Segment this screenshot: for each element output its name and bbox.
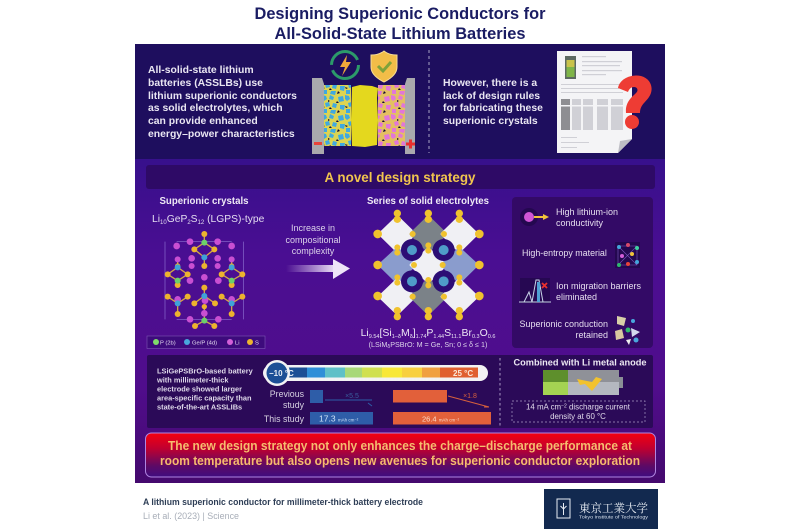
- axis labels: This study: [264, 414, 305, 424]
- panel: introduction: [135, 44, 665, 159]
- heading bar: A novel design strategy: [324, 169, 476, 185]
- legend: crystal atoms: [147, 336, 265, 348]
- intro text: ASSLBs: lithium superionic conductors: [148, 91, 297, 102]
- text: battery summary: [156, 366, 254, 412]
- icon: high-entropy cube: [615, 242, 640, 268]
- footer: citation source: Li et al. (2023) | Science: [143, 511, 239, 521]
- intro text: lack of design rules: [443, 78, 543, 127]
- intro text: ASSLBs: batteries (ASSLBs) use: [148, 78, 263, 89]
- orange bars at 25 degrees: [393, 390, 491, 424]
- blue bars at minus 10 degrees: 17.3 mAh cm⁻²: [319, 414, 359, 424]
- icon: conduction retained: [615, 316, 640, 345]
- heading: series of solid electrolytes: Series of solid electrolytes: [367, 196, 489, 207]
- footer: citation title: A lithium superionic conductor for millimeter-thick battery electrode: [143, 497, 423, 507]
- text: high conductivity: conductivity: [556, 218, 604, 228]
- intro text: ASSLBs: [148, 65, 297, 140]
- caption: increase in compositional complexity: complexity: [292, 246, 335, 256]
- formula: LSiMPSBrO: ]: [413, 327, 416, 339]
- axis labels: Previous: [270, 389, 305, 399]
- caption: increase in compositional complexity: compositional: [285, 235, 341, 245]
- title: [254, 4, 546, 43]
- title: All-Solid-State Lithium Batteries: [274, 24, 526, 43]
- callout: conclusion: [146, 433, 656, 477]
- text: superionic conduction retained: retained: [575, 330, 608, 340]
- callout: conclusion: room temperature but also opens new avenues for superionic conductor exploration: [160, 454, 640, 468]
- icon: lithium ion: [520, 208, 549, 226]
- lattice diagram: [373, 210, 484, 320]
- callout: discharge current: 14 mA cm: [526, 402, 561, 412]
- text: high-entropy: High-entropy material: [522, 248, 607, 258]
- formula: LSiMPSBrO: 1–δ: [392, 334, 401, 340]
- callout: discharge current: [512, 401, 645, 422]
- formula: LSiMPSBrO: 0.3: [472, 334, 480, 340]
- panel: battery performance: [147, 355, 653, 428]
- logo: Tokyo Institute of Technology: Tokyo Institute of Technology: [579, 514, 649, 520]
- intro text: lack of design rules: lack of design rules: [443, 91, 540, 102]
- illustration: solid-state battery: [312, 78, 415, 154]
- formula: LSiMPSBrO: 1.44: [433, 334, 444, 340]
- intro text: lack of design rules: However, there is a: [443, 78, 537, 89]
- panel: novel design strategy: [135, 159, 665, 483]
- icon: minus terminal: [314, 142, 322, 145]
- text: ion migration barriers: Ion migration barriers: [556, 281, 642, 291]
- intro text: ASSLBs: All-solid-state lithium: [148, 65, 254, 76]
- legend: crystal atoms: S: [255, 340, 259, 346]
- text: superionic conduction retained: Superionic conduction: [519, 319, 608, 329]
- axis labels: study: [283, 400, 305, 410]
- formula: LSiMPSBrO: S: [444, 327, 451, 339]
- heading bar: [146, 165, 655, 189]
- formula note: (LSiM: [369, 340, 387, 349]
- text: ion migration barriers: eliminated: [556, 292, 597, 302]
- blue bars at minus 10 degrees: [310, 390, 373, 424]
- heading: superionic crystals: Superionic crystals: [160, 196, 249, 207]
- text: high conductivity: [556, 207, 618, 228]
- orange bars at 25 degrees: ×1.8: [463, 393, 477, 400]
- bar chart: capacity comparison: [264, 389, 491, 424]
- formula: LGPS: GeP: [167, 214, 187, 225]
- legend: crystal atoms: Ge/P (4d): [192, 340, 217, 346]
- formula: LSiMPSBrO: 0.6: [488, 334, 495, 340]
- intro text: ASSLBs: can provide enhanced: [148, 116, 258, 127]
- text: superionic conduction retained: [519, 319, 608, 340]
- icon: question mark: [618, 76, 652, 129]
- icon: charging cycle: [332, 52, 358, 78]
- formula: LSiMPSBrO: Li: [361, 327, 369, 339]
- formula note: δ: [387, 344, 390, 350]
- caption: increase in compositional complexity: Increase in: [291, 223, 335, 233]
- legend: crystal atoms: P (2b): [160, 340, 176, 346]
- callout: discharge current: −2: [561, 404, 567, 410]
- illustration: research paper: [557, 51, 632, 153]
- text: battery summary: state-of-the-art ASSLIBs: [157, 402, 242, 412]
- intro text: ASSLBs: energy–power characteristics: [148, 129, 295, 140]
- formula: LSiMPSBrO: Br: [461, 327, 472, 339]
- icon: plus terminal: [406, 140, 415, 148]
- icon: battery: [543, 370, 623, 395]
- formula: LSiMPSBrO: O: [480, 327, 488, 339]
- formula: LGPS: Li: [152, 214, 160, 225]
- heading: Li metal anode: Combined with Li metal anode: [514, 358, 646, 368]
- formula: LSiMPSBrO: 9.54: [369, 334, 379, 340]
- text: battery summary: area-specific capacity than: [157, 394, 252, 402]
- label: 25 degrees: 25 °C: [453, 369, 473, 378]
- text: battery summary: with millimeter-thick: [156, 376, 229, 384]
- blue bars at minus 10 degrees: ×5.5: [345, 393, 359, 400]
- text: ion migration barriers: [556, 281, 642, 302]
- formula: LSiMPSBrO: [Si: [379, 327, 392, 339]
- legend: crystal atoms: Li: [235, 340, 240, 346]
- text: battery summary: LSiGePSBrO-based battery: [157, 366, 254, 376]
- callout: discharge current: discharge current: [567, 402, 631, 412]
- callout: conclusion: The new design strategy not only enhances the charge–discharge performance at: [168, 439, 633, 453]
- arrow: increasing complexity: [286, 259, 350, 279]
- formula: LSiMPSBrO: P: [426, 327, 433, 339]
- logo: Tokyo Institute of Technology: [544, 489, 658, 529]
- title: Designing Superionic Conductors for: [254, 4, 546, 23]
- formula: LGPS: 12: [198, 220, 205, 226]
- caption: increase in compositional complexity: [285, 223, 341, 256]
- formula: LGPS: 10: [160, 220, 167, 226]
- crystal structure diagram: [165, 231, 245, 329]
- logo: Tokyo Institute of Technology: 東京工業大学: [579, 500, 648, 516]
- icon: safety shield: [371, 51, 397, 82]
- formula: LGPS: 2: [187, 220, 191, 226]
- callout: discharge current: density at 60 °C: [550, 412, 606, 421]
- intro text: lack of design rules: for fabricating these: [443, 103, 543, 114]
- label: minus 10 degrees: −10 °C: [269, 369, 294, 378]
- thermometer: [263, 360, 488, 386]
- formula: LSiMPSBrO: M: [401, 327, 410, 339]
- formula: LSiMPSBrO: 1.74: [416, 334, 426, 340]
- text: high conductivity: High lithium-ion: [556, 207, 618, 217]
- formula: LGPS: S: [191, 214, 198, 225]
- formula: LGPS: (LGPS)-type: [204, 214, 265, 225]
- text: battery summary: electrode showed larger: [157, 384, 242, 394]
- panel: properties: [512, 197, 653, 348]
- intro text: ASSLBs: as solid electrolytes, which: [148, 103, 283, 114]
- formula: LSiMPSBrO: 11.1: [451, 334, 461, 340]
- orange bars at 25 degrees: 26.4 mAh cm⁻²: [422, 414, 460, 424]
- icon: migration barrier peaks: [519, 278, 551, 303]
- formula note: PSBrO: M = Ge, Sn; 0 ≤ δ ≤ 1): [390, 340, 487, 349]
- formula: LSiMPSBrO: δ: [410, 334, 413, 340]
- intro text: lack of design rules: superionic crystals: [443, 116, 538, 127]
- axis labels: [264, 389, 305, 424]
